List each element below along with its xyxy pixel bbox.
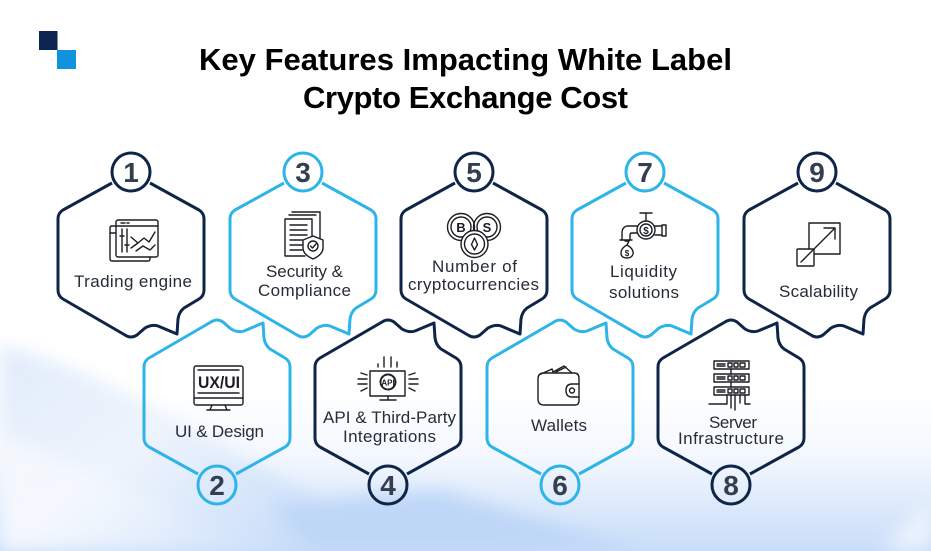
icon: scale arrow: [797, 223, 840, 266]
label: Number of: [432, 257, 517, 276]
label: Wallets: [531, 416, 587, 435]
label: [258, 262, 351, 300]
panel: 3 security: 3: [295, 157, 311, 188]
panel: 1 trading engine: [58, 153, 204, 337]
panel: 5 cryptocurrencies: 5: [466, 157, 482, 188]
panel: 7 liquidity: 7: [637, 157, 653, 188]
icon: monitor: [194, 366, 243, 410]
label: Server: [709, 413, 757, 432]
icon: api monitor: [358, 357, 418, 400]
panel: 3 security: [230, 153, 376, 337]
icon: document shield: [285, 212, 323, 259]
label: [609, 262, 679, 302]
panel: 6 wallets: 6: [552, 470, 568, 501]
label: cryptocurrencies: [408, 275, 539, 294]
label: [323, 408, 456, 446]
label: API & Third-Party: [323, 408, 456, 427]
panel: 2 ui design: 2: [209, 470, 225, 501]
panel: 4 api: 4: [380, 470, 396, 501]
panel: 5 cryptocurrencies: S: [483, 220, 492, 235]
logo: [39, 31, 76, 69]
label: Infrastructure: [678, 429, 784, 448]
panel: 2 ui design: UX/UI: [198, 373, 240, 392]
panel: 7 liquidity: $: [643, 226, 649, 237]
icon: server rack: [709, 361, 750, 410]
panel: 9 scalability: [744, 153, 890, 337]
icon: wallet: [538, 366, 579, 405]
panel: 7 liquidity: [572, 153, 718, 337]
label: [408, 257, 539, 294]
panel: 1 trading engine: 1: [123, 157, 139, 188]
panel: 8 server: [658, 320, 804, 504]
label: UI & Design: [175, 422, 264, 441]
title: [199, 42, 732, 115]
title: Key Features Impacting White Label: [199, 42, 732, 77]
label: solutions: [609, 283, 679, 302]
label: Scalability: [779, 282, 858, 301]
panel: 2 ui design: [144, 320, 290, 504]
label: Integrations: [343, 427, 436, 446]
label: Compliance: [258, 281, 351, 300]
icon: trading chart: [110, 220, 158, 261]
title: Crypto Exchange Cost: [303, 80, 628, 115]
icon: coins: [448, 214, 500, 258]
label: Security &: [266, 262, 344, 281]
label: Liquidity: [610, 262, 678, 281]
icon: tap with money: [620, 213, 666, 258]
panel: 4 api: API: [381, 378, 395, 388]
panel: 9 scalability: 9: [809, 157, 825, 188]
panel: 5 cryptocurrencies: B: [456, 220, 466, 235]
panel: 4 api: [315, 320, 461, 504]
label: Trading engine: [74, 272, 192, 291]
panel: 8 server: 8: [723, 470, 739, 501]
label: [678, 413, 784, 448]
panel: 5 cryptocurrencies: [401, 153, 547, 337]
panel: 7 liquidity: $: [625, 249, 630, 258]
panel: 6 wallets: [487, 320, 633, 504]
